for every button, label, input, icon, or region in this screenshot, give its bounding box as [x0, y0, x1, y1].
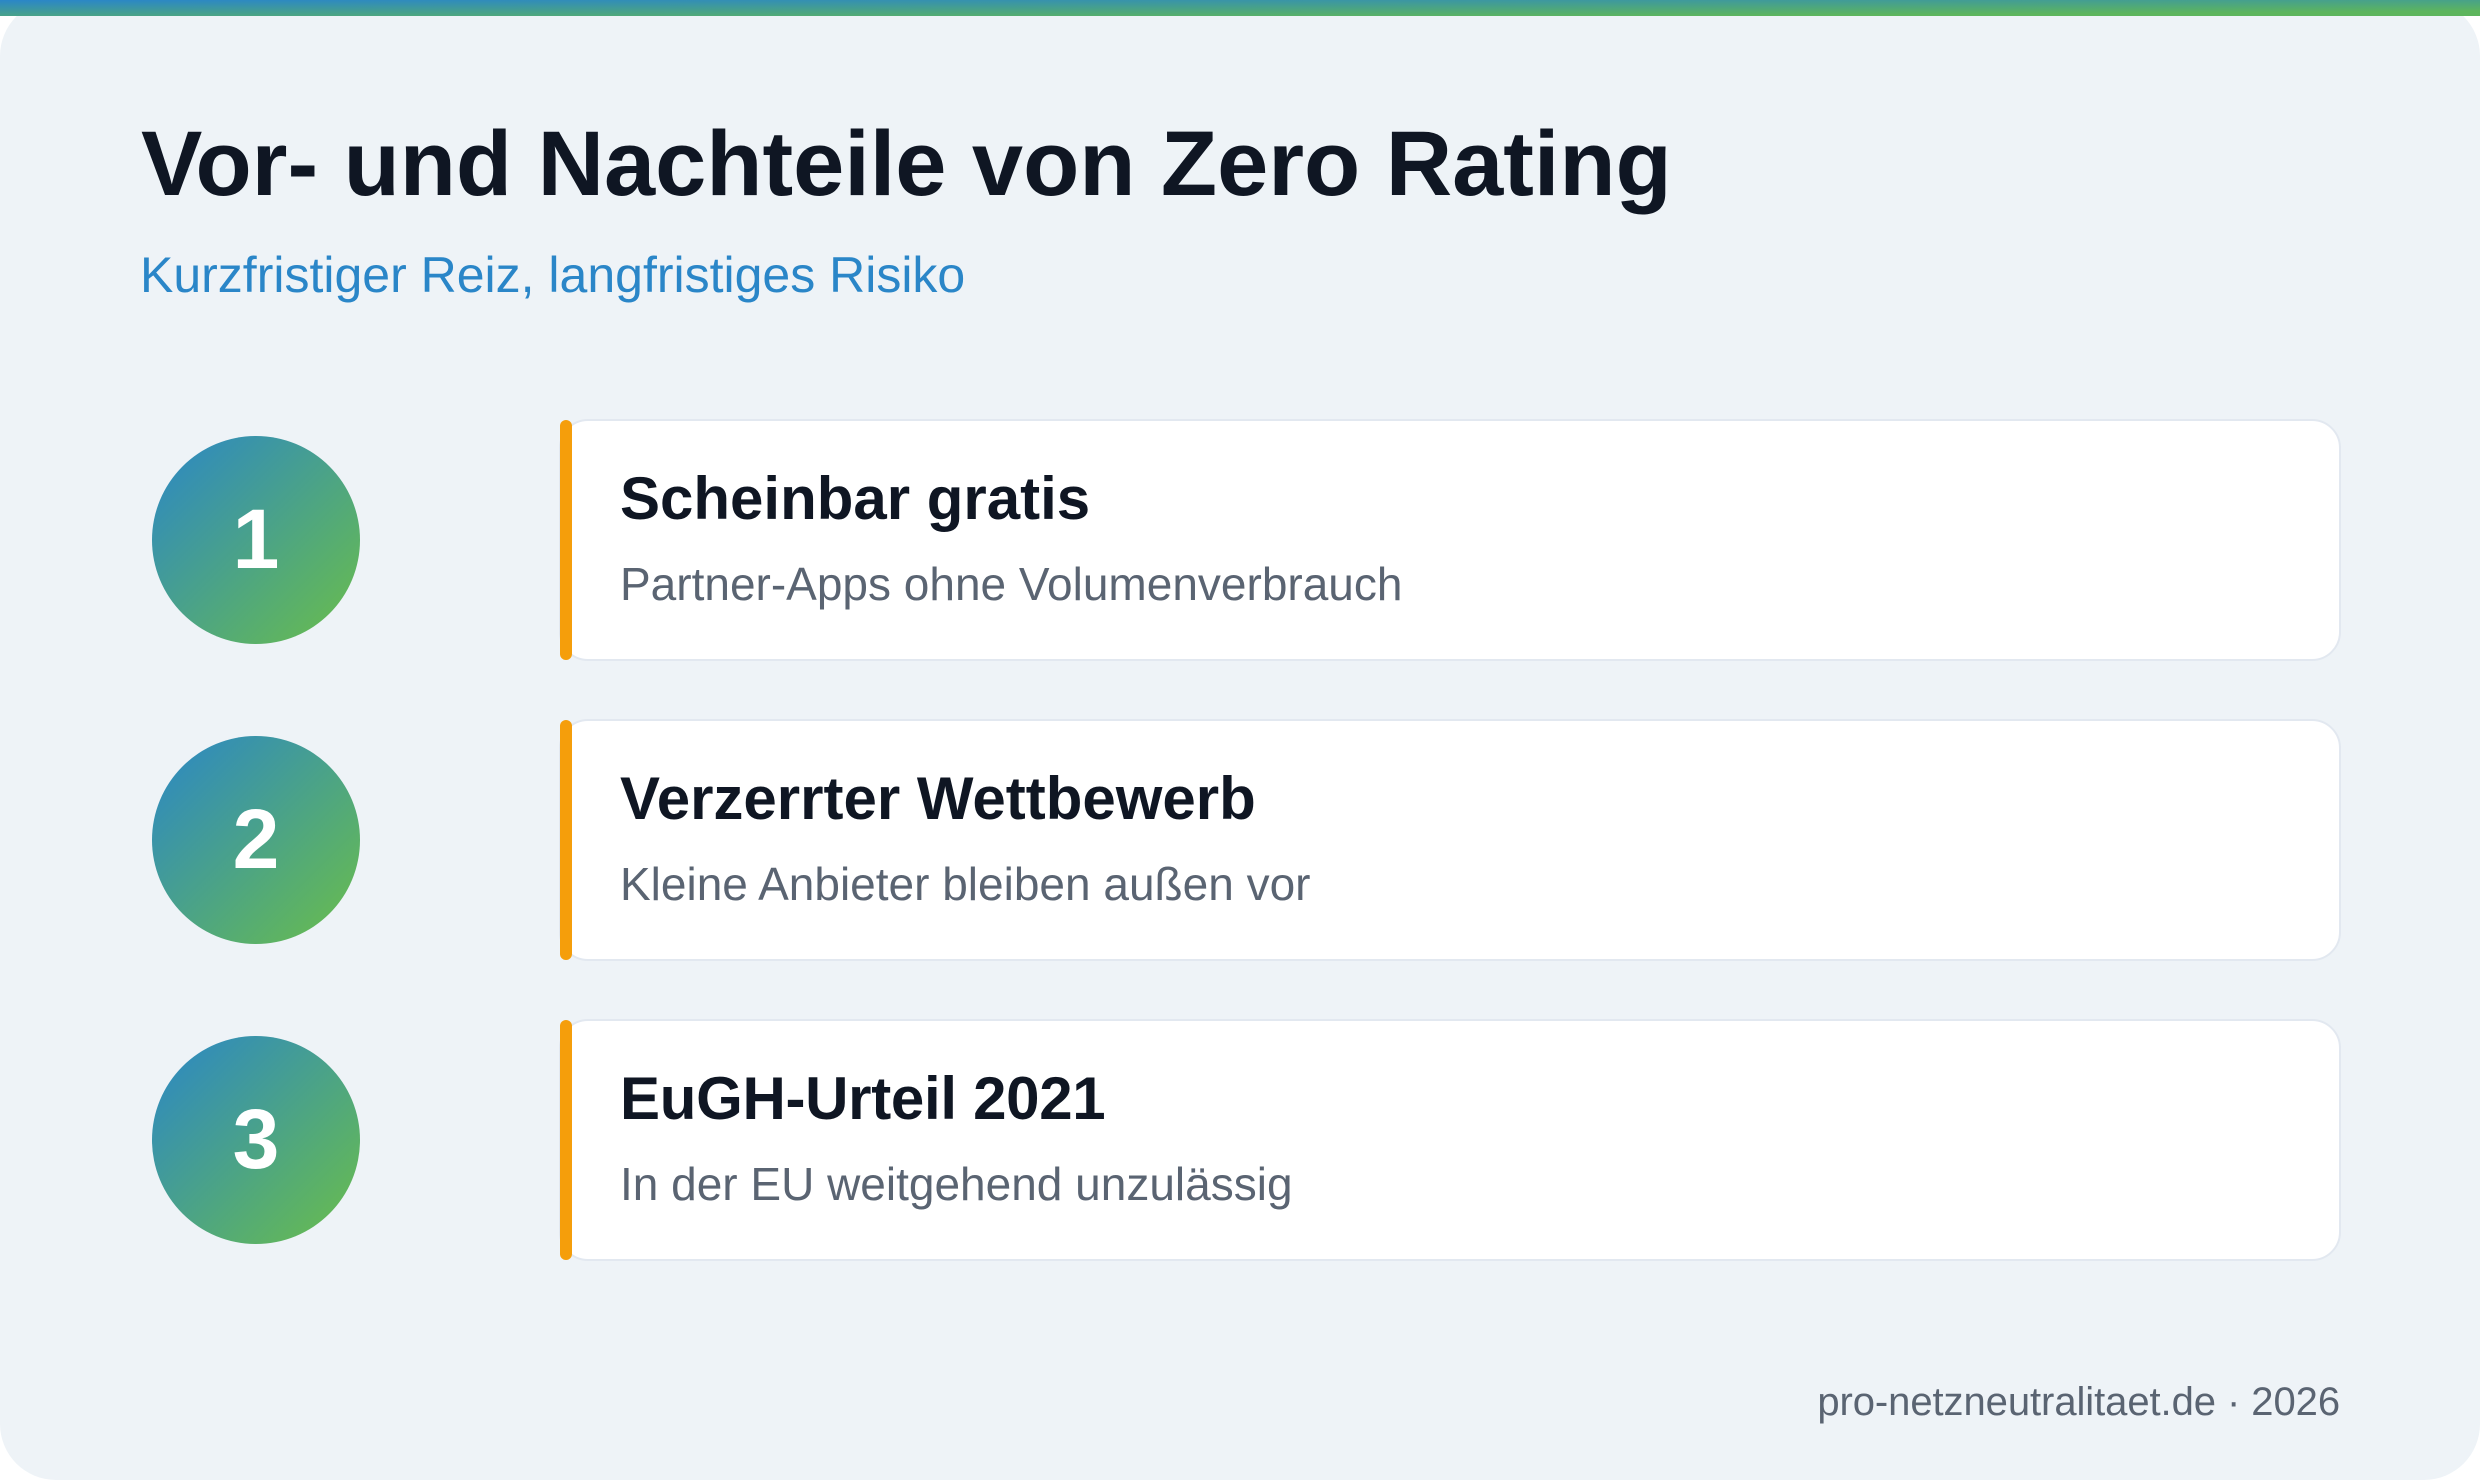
card 1 description: Partner-Apps ohne Volumenverbrauch: [620, 558, 1402, 610]
card 2 description: Kleine Anbieter bleiben außen vor: [620, 858, 1310, 910]
card 3 accent bar: [560, 1020, 572, 1260]
title: Vor- und Nachteile von Zero Rating: [141, 113, 1672, 215]
footer: pro-netzneutralitaet.de · 2026: [1817, 1380, 2340, 1424]
icon: number badge 3: 3: [233, 1092, 279, 1186]
card 2 heading: Verzerrter Wettbewerb: [620, 765, 1256, 832]
icon: number badge 3: [152, 1036, 360, 1244]
icon: number badge 1: [152, 436, 360, 644]
card 3 heading: EuGH-Urteil 2021: [620, 1065, 1105, 1132]
card 1 heading: Scheinbar gratis: [620, 465, 1090, 532]
card 2 accent bar: [560, 720, 572, 960]
icon: number badge 2: 2: [233, 792, 279, 886]
icon: number badge 2: [152, 736, 360, 944]
card 3 description: In der EU weitgehend unzulässig: [620, 1158, 1293, 1210]
card 3: [559, 1019, 2341, 1261]
icon: number badge 1: 1: [233, 492, 279, 586]
subtitle: Kurzfristiger Reiz, langfristiges Risiko: [140, 247, 965, 303]
card 1: [559, 419, 2341, 661]
top gradient bar: [0, 0, 2480, 16]
card 2: [559, 719, 2341, 961]
card 1 accent bar: [560, 420, 572, 660]
